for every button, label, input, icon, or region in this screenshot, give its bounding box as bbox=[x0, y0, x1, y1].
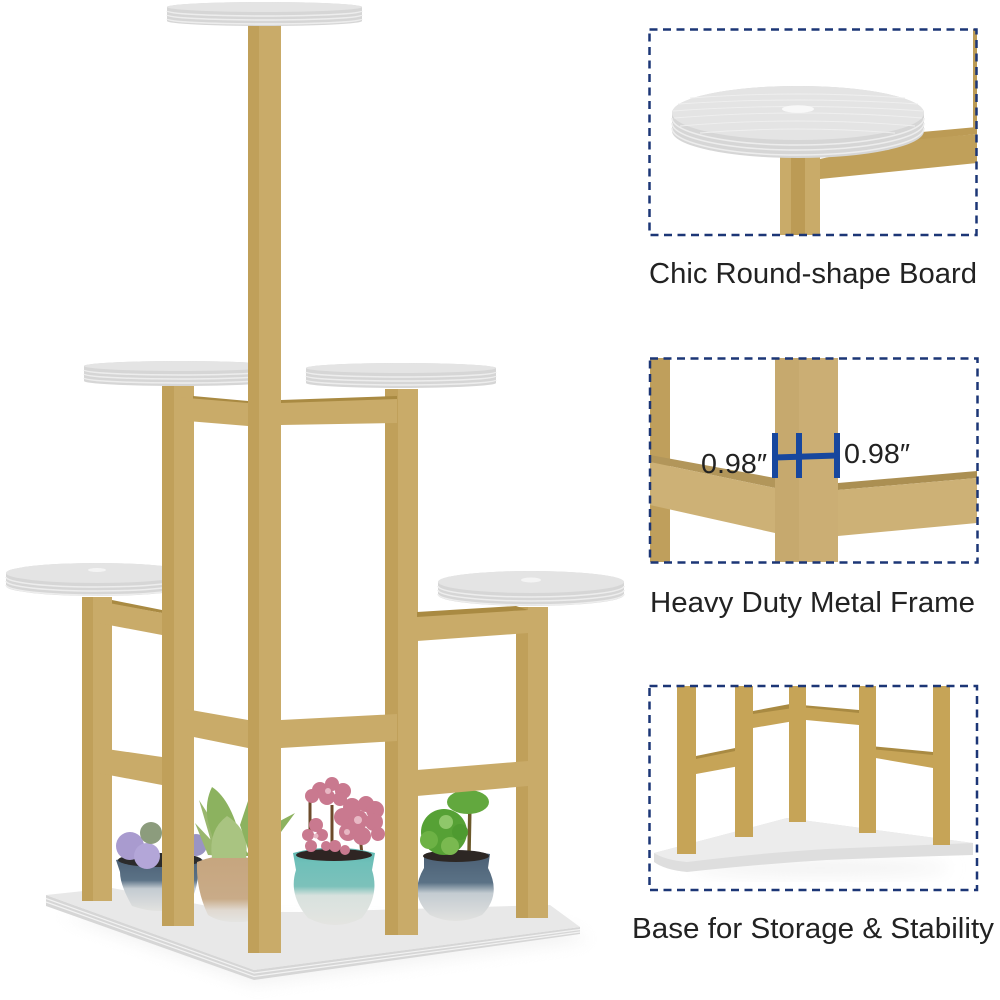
dashed border bbox=[650, 358, 978, 562]
right bar bbox=[838, 471, 977, 536]
left post bbox=[650, 358, 670, 562]
round board bbox=[672, 86, 924, 158]
posts bbox=[677, 686, 950, 854]
shelf disc: upper right bbox=[306, 363, 496, 388]
floor shadow bbox=[60, 915, 590, 985]
plant: green succulents and blue pot bbox=[417, 790, 494, 921]
centre post bbox=[775, 358, 838, 562]
caption: Heavy Duty Metal Frame bbox=[650, 587, 975, 619]
base board bbox=[654, 818, 973, 875]
dashed border bbox=[650, 30, 976, 235]
plant: pink succulents and teal pot bbox=[293, 777, 385, 925]
caption: Chic Round-shape Board bbox=[649, 258, 977, 290]
centre post bbox=[248, 23, 281, 953]
metal frame bbox=[82, 23, 548, 953]
dimension: right: 0.98″ bbox=[844, 438, 910, 469]
crossbars bbox=[696, 704, 933, 774]
shelf disc: lower right bbox=[438, 571, 624, 606]
crossbars bbox=[93, 396, 528, 796]
dashed border bbox=[650, 686, 977, 890]
thin post at panel edge bbox=[973, 29, 977, 129]
far left post bbox=[82, 597, 112, 901]
panel: heavy duty metal frame bbox=[650, 358, 978, 619]
gold post bbox=[780, 155, 820, 235]
left bar bbox=[650, 455, 775, 533]
base board bbox=[46, 888, 580, 980]
shelf disc: lower left bbox=[6, 563, 188, 596]
dimension: left: 0.98″ bbox=[701, 448, 767, 479]
dimension marker bbox=[775, 433, 837, 478]
shelf disc: upper left bbox=[84, 361, 276, 386]
panel: base for storage and stability bbox=[632, 686, 994, 945]
plant: purple succulents and pot bbox=[116, 822, 207, 911]
panel: chic round-shape board bbox=[649, 29, 977, 290]
caption: Base for Storage & Stability bbox=[632, 913, 994, 945]
left inner post bbox=[162, 386, 194, 926]
gold crossbar bbox=[820, 127, 977, 179]
shelf disc: top bbox=[167, 2, 362, 26]
far right post bbox=[516, 607, 548, 918]
plant: aloe and tan pot bbox=[195, 787, 295, 922]
right inner post bbox=[385, 389, 418, 935]
